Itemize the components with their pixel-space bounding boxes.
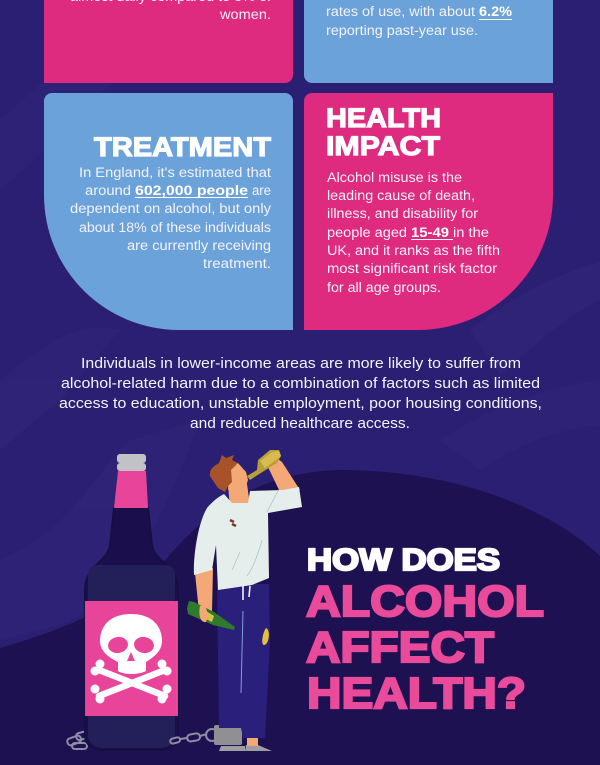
heading: health impact: IMPACT [326,131,441,161]
text: pink panel fragment: women. [219,7,271,22]
text: pink panel fragment [70,0,271,22]
heading: treatment: TREATMENT [94,132,272,162]
trousers [217,584,270,738]
text: treatment body: around [85,183,131,198]
title: AFFECT [306,623,494,672]
icon: skull and crossbones [90,614,172,704]
head [228,463,248,490]
text: treatment body: dependent on alcohol, but only [70,201,271,216]
heading: health impact: HEALTH [326,103,441,133]
text: health impact body: leading cause of death, [327,188,475,203]
text: treatment body: are currently receiving [127,238,271,253]
text: health impact body: UK, and it ranks as the fifth [327,243,500,258]
neck [228,484,250,508]
bottle at mouth [247,450,281,480]
panel: top right blue [304,0,553,83]
text: health impact body: 15-49 [411,225,449,240]
chain: left of bottle [66,730,91,749]
text: lower-income paragraph: and reduced healthcare access. [190,416,410,432]
heading: health impact [326,103,441,161]
icon: poison bottle [66,454,178,750]
title [306,542,544,718]
title: HEALTH? [307,669,526,718]
dark hill background [0,470,600,765]
shirt [194,487,302,590]
text: health impact body: most significant risk factor [327,261,498,276]
text: health impact body: illness, and disability for [327,206,479,221]
text: treatment body: In England, it's estimated that [79,165,271,180]
raised arm [267,456,300,492]
text: blue panel fragment: reporting past-year use. [326,23,478,38]
text: treatment body: treatment. [203,256,271,271]
text: health impact body [327,170,500,295]
text: lower-income paragraph: alcohol-related harm due to a combination of factors such as limited [61,376,540,392]
text: treatment body: about 18% of these individuals [79,220,271,235]
text: health impact body: for all age groups. [327,280,441,295]
text: blue panel fragment: 6.2% [479,4,512,19]
text: lower-income paragraph: access to education, unstable employment, poor housing conditions, [59,396,542,412]
text: lower-income paragraph: Individuals in lower-income areas are more likely to suffer from [81,356,521,372]
text: blue panel fragment [326,4,512,38]
shoes [219,745,272,751]
panel: health impact [304,93,553,330]
text: treatment body: 602,000 people [135,183,248,198]
title: HOW DOES [307,542,500,577]
text: health impact body: in the [453,225,489,240]
text: health impact body: people aged [327,225,407,240]
green bottle [187,601,235,630]
text: blue panel fragment: rates of use, with about [326,4,475,19]
text: lower-income paragraph [59,356,542,432]
text: health impact body: Alcohol misuse is the [327,170,462,185]
icon: man drinking [170,450,302,751]
text: treatment body [70,165,271,271]
chain and cuff [170,725,242,745]
panel: treatment [44,93,293,330]
title: ALCOHOL [306,577,544,626]
panel: top left pink [44,0,293,83]
lower arm [195,568,213,622]
text: treatment body: are [252,183,271,198]
